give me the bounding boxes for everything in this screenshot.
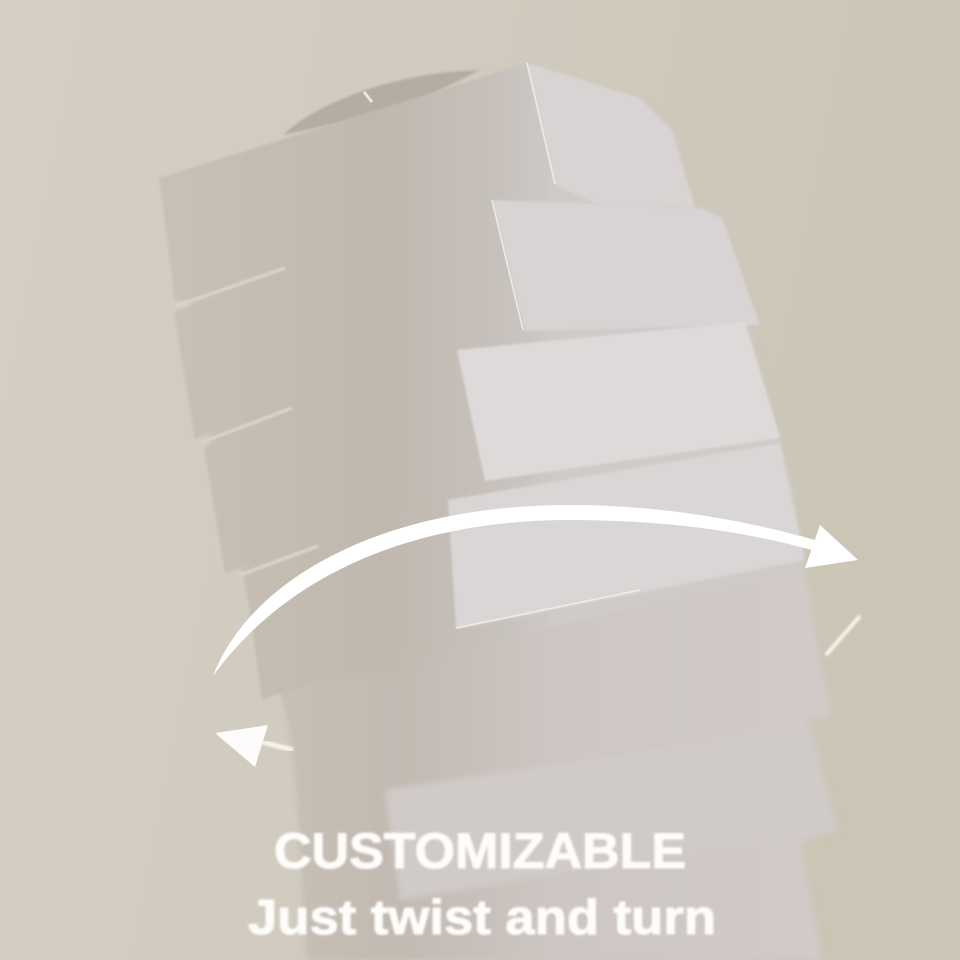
- lower blurred blocks: [285, 570, 838, 960]
- top cap: [283, 70, 480, 135]
- highlight edges: [364, 63, 640, 628]
- block 3 right face: [457, 322, 780, 481]
- arrow: rear right tail fragment: [826, 616, 860, 655]
- caption subheading: Just twist and turn: [248, 891, 716, 945]
- soft seams between blocks: [176, 268, 318, 575]
- block 4 right face: [448, 443, 805, 629]
- block 4 left face: [245, 505, 458, 700]
- arrow: large curved white arrow: [213, 505, 858, 676]
- block 1 right face: [527, 63, 695, 208]
- block 2 left face: [174, 200, 600, 440]
- block 3 left face: [204, 350, 485, 573]
- product: stacked twisted blocks: [159, 63, 838, 960]
- body fill behind blocks: [190, 140, 820, 800]
- block 2 right face: [492, 200, 760, 331]
- block 1 left face: [159, 63, 600, 302]
- caption heading: CUSTOMIZABLE: [274, 823, 686, 879]
- arrow: rear small left arrowhead: [215, 725, 293, 767]
